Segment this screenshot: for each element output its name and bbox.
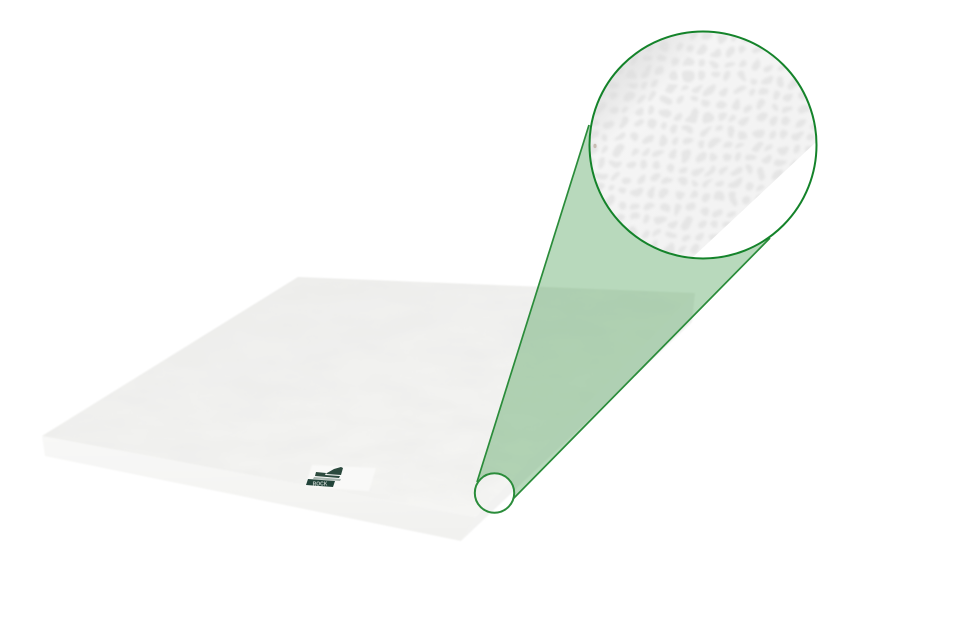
- product label: [305, 465, 376, 491]
- white background wedge: [694, 143, 816, 258]
- foam bubbles: [591, 33, 814, 254]
- green magnification cone: [477, 125, 770, 499]
- slab top face: [42, 277, 695, 517]
- label backing: [305, 465, 376, 491]
- logo name bar: ROCK: [313, 482, 328, 488]
- logo mark: [313, 467, 343, 481]
- slab surface mottling: [42, 277, 695, 517]
- slab front face: [42, 436, 476, 541]
- slab right face: [461, 293, 695, 541]
- small source circle: [475, 473, 514, 513]
- infographic: insulation slab with magnified detail: [43, 30, 818, 540]
- circle outline: [590, 32, 816, 258]
- magnified foam texture circle: [588, 30, 818, 260]
- speck: [593, 144, 597, 148]
- cone edges: [477, 125, 770, 499]
- insulation slab: [42, 277, 695, 541]
- foam surface: [585, 27, 821, 263]
